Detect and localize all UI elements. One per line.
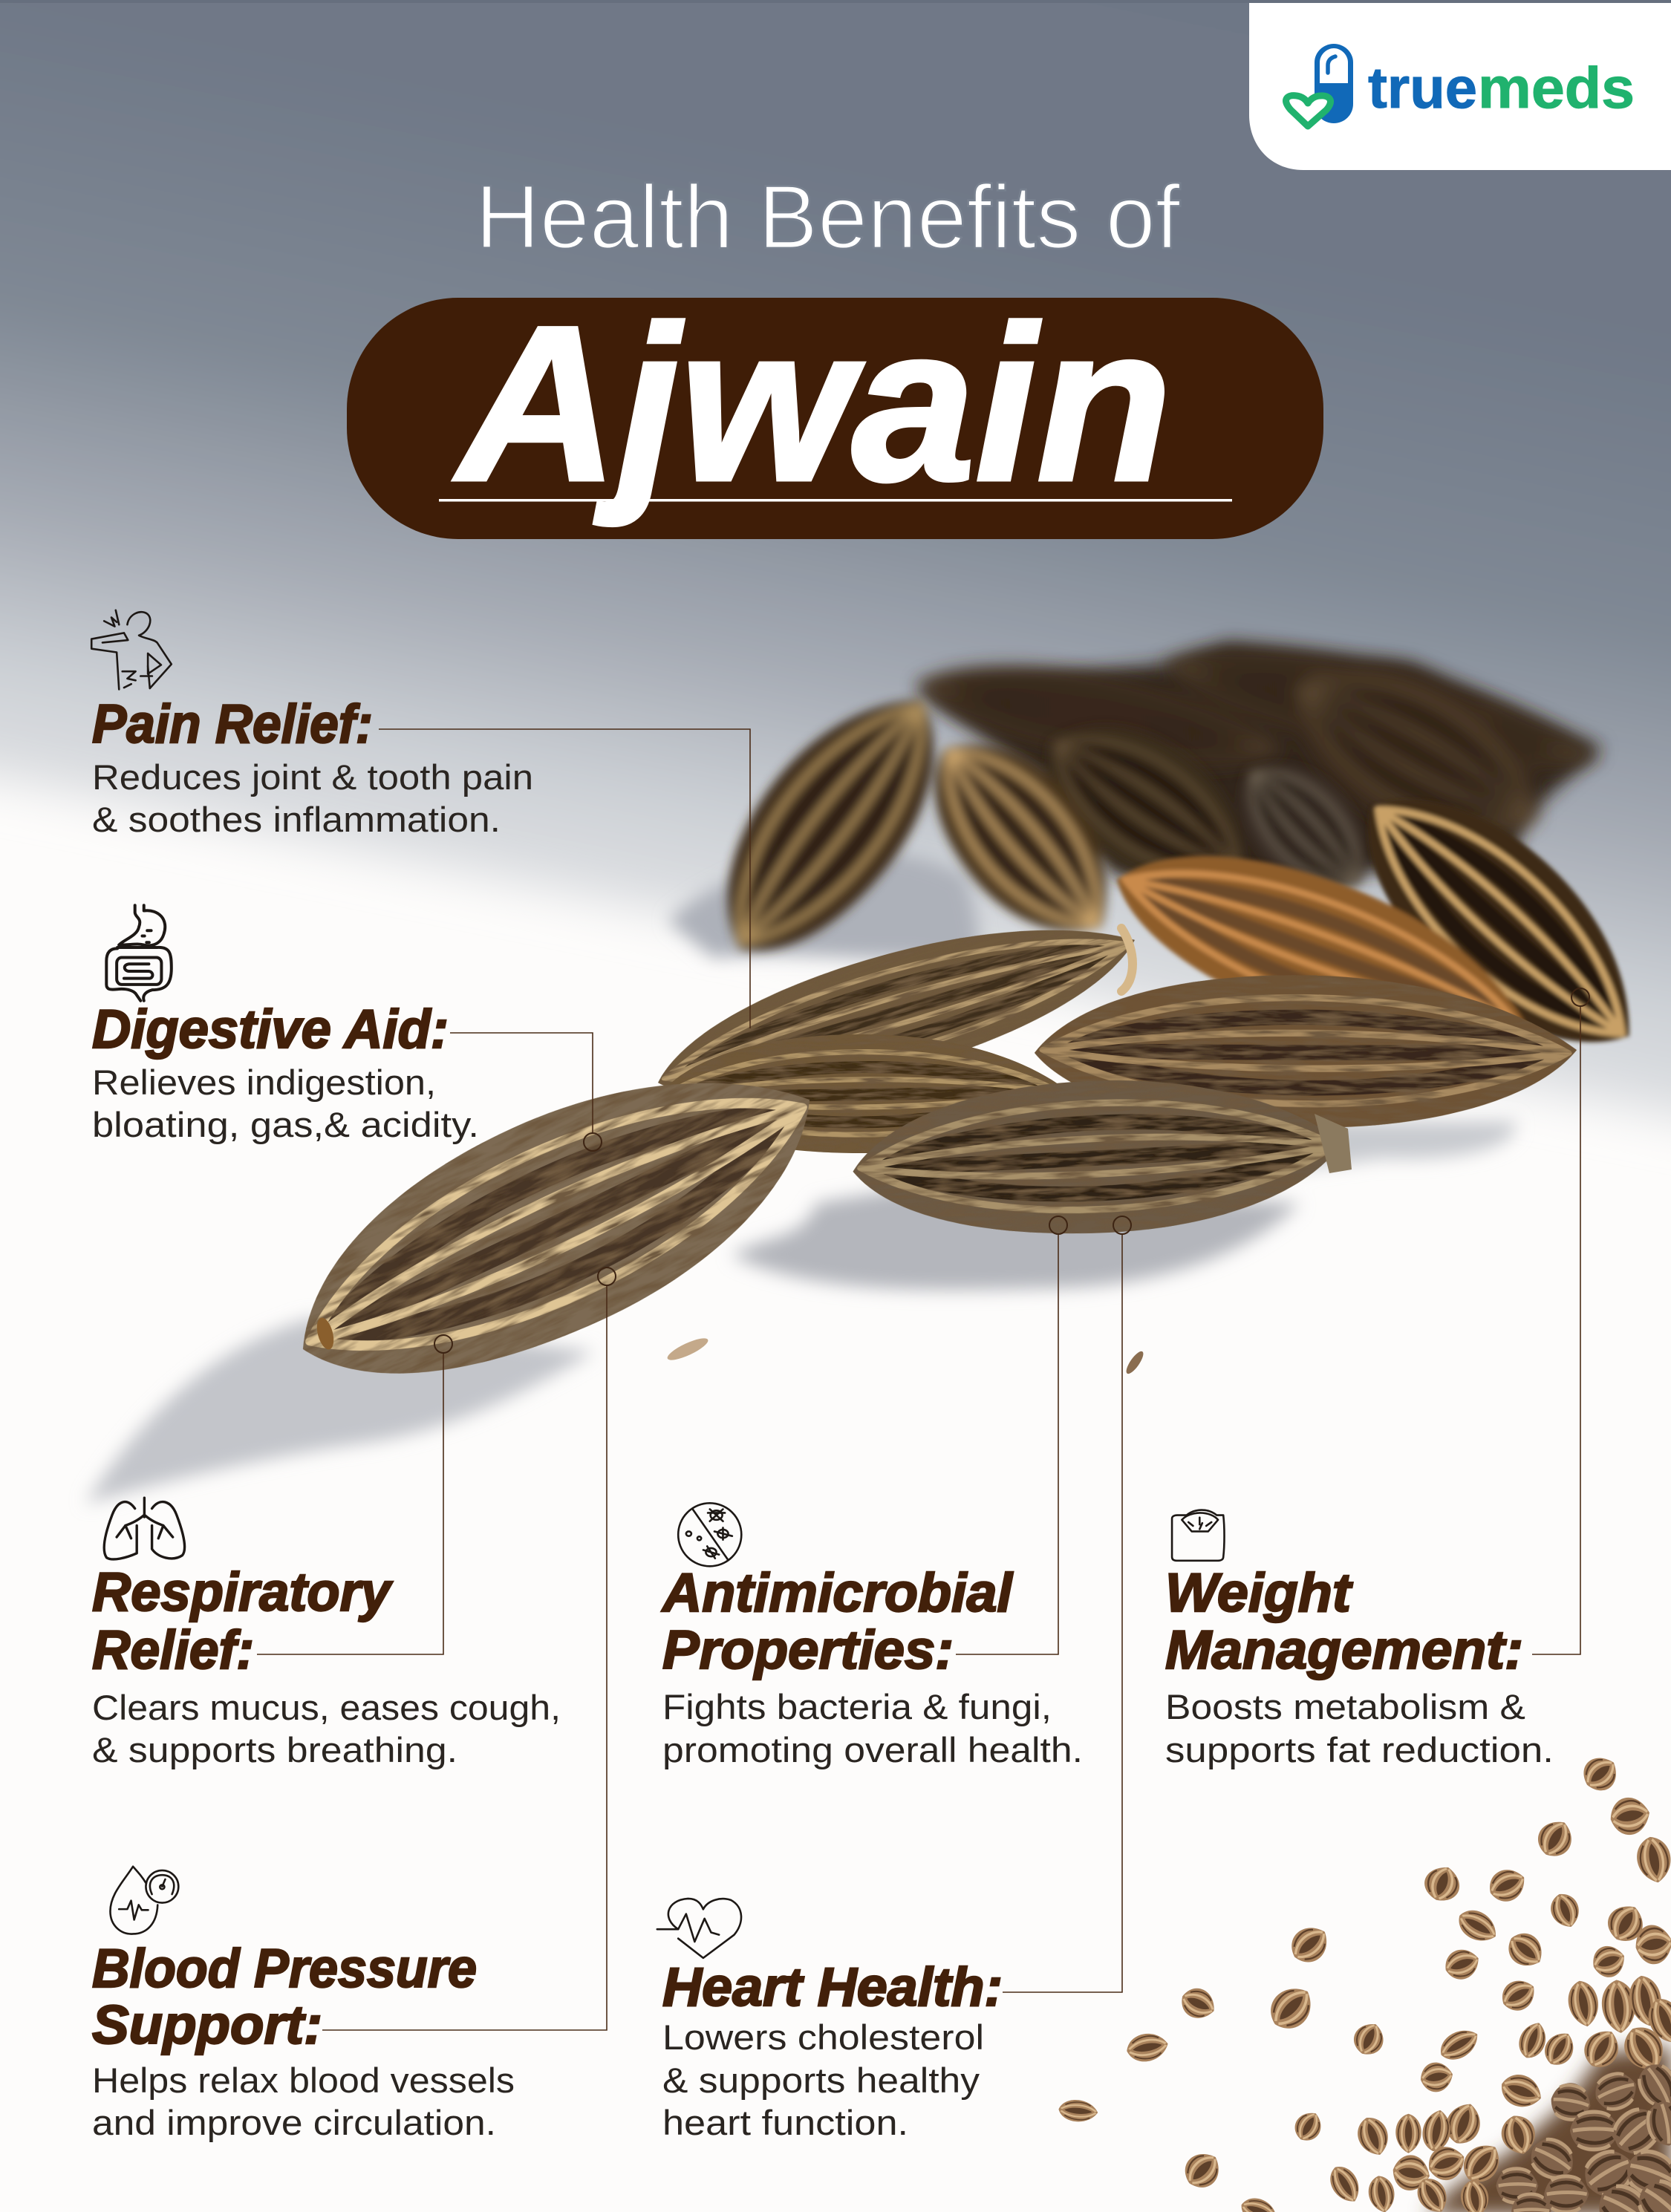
tiny seed flake — [665, 1334, 711, 1364]
connector: heart health — [1003, 1216, 1131, 1992]
description: Clears mucus, eases cough, — [92, 1688, 561, 1727]
description: Reduces joint & tooth pain — [92, 757, 533, 797]
description: Helps relax blood vessels — [92, 2061, 515, 2100]
description: & supports breathing. — [92, 1730, 457, 1769]
panel: antimicrobial properties — [661, 1503, 1083, 1769]
heading: Relief: — [92, 1620, 254, 1680]
logo wordmark: meds — [1478, 55, 1635, 120]
title pill: Ajwain: Ajwain — [452, 280, 1172, 528]
description: & soothes inflammation. — [92, 800, 501, 839]
seed shadows — [85, 851, 1516, 1504]
heading: Weight — [1165, 1563, 1353, 1623]
panel: weight management — [1165, 1510, 1554, 1769]
scattered small seeds — [1058, 1749, 1671, 2212]
description: supports fat reduction. — [1165, 1730, 1554, 1769]
icon: digestive system — [106, 905, 172, 1001]
background seeds out of focus — [680, 619, 1606, 989]
description: bloating, gas,& acidity. — [92, 1105, 479, 1144]
heading: Heart Health: — [662, 1957, 1003, 2017]
description: & supports healthy — [662, 2061, 980, 2100]
panel: heart health — [657, 1899, 1003, 2142]
icon: lungs — [104, 1498, 185, 1559]
description — [662, 2017, 984, 2142]
description — [92, 757, 533, 839]
connector: antimicrobial — [956, 1216, 1067, 1654]
logo wordmark: true — [1368, 55, 1477, 120]
connector: weight management — [1532, 988, 1589, 1654]
panel: pain relief — [91, 610, 533, 839]
heading: Respiratory — [92, 1562, 393, 1622]
panel: respiratory relief — [92, 1498, 561, 1769]
icon: heart with pulse — [657, 1899, 741, 1958]
heading — [92, 1939, 477, 2055]
description: Boosts metabolism & — [1165, 1687, 1525, 1726]
icon: blood drop and gauge — [110, 1867, 178, 1934]
description — [92, 2061, 515, 2142]
heading: Management: — [1165, 1620, 1523, 1680]
description — [662, 1687, 1083, 1769]
logo capsule icon — [1286, 44, 1353, 126]
description — [1165, 1687, 1554, 1769]
heading — [92, 1562, 393, 1680]
heading: Pain Relief: — [92, 694, 373, 754]
icon: body pain — [91, 610, 172, 689]
panel: blood pressure support — [92, 1867, 515, 2142]
description: and improve circulation. — [92, 2103, 496, 2142]
icon: weighing scale — [1172, 1510, 1225, 1561]
description: Relieves indigestion, — [92, 1063, 436, 1102]
connector: digestive aid — [450, 1033, 602, 1151]
description: Fights bacteria & fungi, — [662, 1687, 1052, 1726]
description: promoting overall health. — [662, 1730, 1083, 1769]
heading: Blood Pressure — [92, 1939, 477, 1999]
description: Lowers cholesterol — [662, 2017, 984, 2057]
title: Health Benefits of — [475, 166, 1181, 267]
heading: Support: — [92, 1995, 322, 2055]
heading: Digestive Aid: — [92, 999, 449, 1060]
description — [92, 1063, 479, 1144]
description: heart function. — [662, 2103, 908, 2142]
title pill: Ajwain — [347, 280, 1323, 539]
foreground seeds in focus — [255, 889, 1578, 1438]
logo wordmark — [1368, 55, 1635, 120]
heading — [661, 1563, 1014, 1680]
connector: pain relief — [379, 729, 750, 1028]
logo panel — [1249, 3, 1671, 170]
connector: respiratory relief — [257, 1335, 452, 1654]
heading: Properties: — [662, 1620, 954, 1680]
connector: blood pressure — [322, 1268, 616, 2030]
icon: microbes crossed out — [678, 1503, 741, 1566]
description — [92, 1688, 561, 1769]
heading — [1165, 1563, 1523, 1680]
mid focus seeds — [1093, 749, 1671, 1095]
panel: digestive aid — [92, 905, 479, 1144]
heading: Antimicrobial — [661, 1563, 1014, 1623]
